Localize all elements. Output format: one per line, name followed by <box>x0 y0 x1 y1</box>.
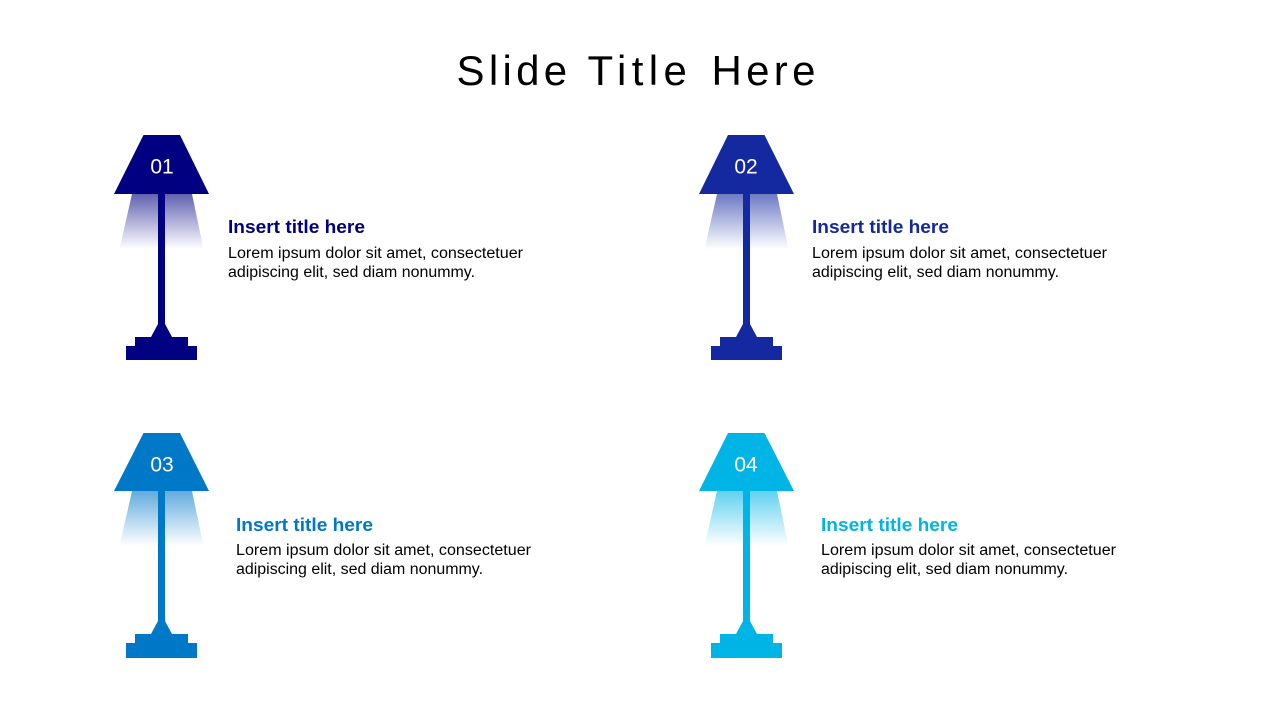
heading: item 03: Insert title here <box>236 515 373 535</box>
text block: item 02: adipiscing elit, sed diam nonummy. <box>812 264 1059 281</box>
icon: lamp 03 <box>114 433 209 658</box>
heading: item 02: Insert title here <box>812 217 949 237</box>
heading: item 04: Insert title here <box>821 515 958 535</box>
text block: item 02 <box>812 245 1107 281</box>
panel: item 04 <box>699 433 1116 658</box>
text block: item 03 <box>236 542 531 578</box>
number 03: 03 <box>150 454 174 476</box>
text block: item 03: Lorem ipsum dolor sit amet, consectetuer <box>236 542 531 559</box>
text block: item 01: adipiscing elit, sed diam nonummy. <box>228 264 475 281</box>
text block: item 01: Lorem ipsum dolor sit amet, consectetuer <box>228 245 523 262</box>
number 02: 02 <box>734 156 758 178</box>
text block: item 02: Lorem ipsum dolor sit amet, consectetuer <box>812 245 1107 262</box>
title: Slide <box>456 47 571 94</box>
text block: item 04: adipiscing elit, sed diam nonummy. <box>821 561 1068 578</box>
heading: item 01: Insert title here <box>228 217 365 237</box>
text block: item 03: adipiscing elit, sed diam nonummy. <box>236 561 483 578</box>
icon: lamp 04 <box>699 433 794 658</box>
panel: item 03 <box>114 433 531 658</box>
text block: item 04 <box>821 542 1116 578</box>
number 04: 04 <box>734 454 758 476</box>
text block: item 01 <box>228 245 523 281</box>
title: Here <box>712 47 820 94</box>
text block: item 04: Lorem ipsum dolor sit amet, consectetuer <box>821 542 1116 559</box>
icon: lamp 02 <box>699 135 794 360</box>
panel: item 02 <box>699 135 1107 360</box>
number 01: 01 <box>150 156 174 178</box>
title: Title <box>588 47 692 94</box>
icon: lamp 01 <box>114 135 209 360</box>
panel: item 01 <box>114 135 523 360</box>
